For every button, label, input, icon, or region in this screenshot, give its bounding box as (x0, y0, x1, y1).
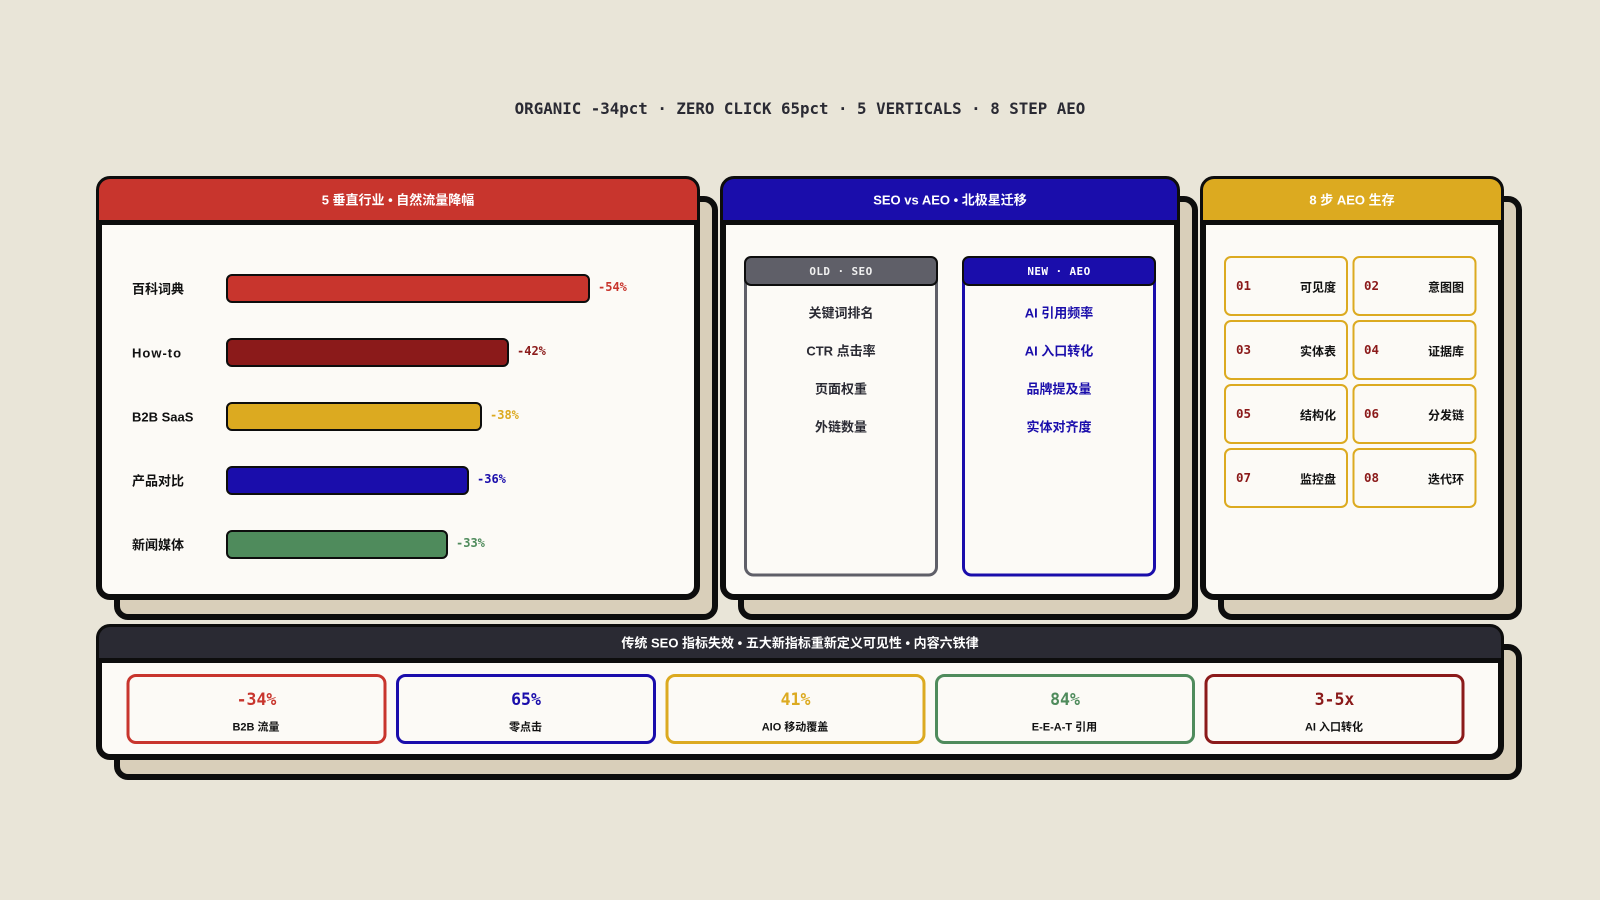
metric card: E-E-A-T 引用: 84% (1050, 690, 1080, 709)
panel shadow: steps (1221, 199, 1519, 617)
bar row: 产品对比 (132, 467, 507, 494)
column: old SEO: OLD · SEO (809, 265, 873, 278)
step 05: 结构化 (1300, 408, 1336, 422)
metric card: AIO 移动覆盖: 41% (781, 690, 810, 709)
bar row: 新闻媒体: -33% (456, 536, 486, 550)
column: new AEO: 品牌提及量 (1026, 382, 1092, 396)
bar row: 新闻媒体: 新闻媒体 (132, 538, 184, 552)
column: old SEO: 页面权重 (815, 382, 867, 396)
metric card: B2B 流量 (128, 676, 385, 742)
bar row: 百科词典: 百科词典 (132, 282, 184, 296)
step 08: 08 (1364, 470, 1379, 485)
panel shadow: verticals (117, 199, 715, 617)
bar row: How-to (132, 339, 547, 366)
step 04: 证据库 (1428, 344, 1464, 358)
panel: 8 step AEO (1203, 179, 1501, 597)
column: new AEO: 实体对齐度 (1026, 420, 1092, 434)
step 02: 02 (1364, 278, 1379, 293)
bar row: 百科词典 (132, 275, 628, 302)
panel header: metrics: 传统 SEO 指标失效 • 五大新指标重新定义可见性 • 内容六铁律 (621, 636, 979, 650)
panel header: 8 step: 8 步 AEO 生存 (1309, 192, 1395, 208)
step 04: 04 (1364, 342, 1379, 357)
column: new AEO: AI 入口转化 (1025, 344, 1093, 358)
step 07: 07 (1236, 470, 1251, 485)
bar row: B2B SaaS: -38% (490, 408, 520, 422)
bar row: How-to: How-to (132, 346, 182, 360)
metric card: B2B 流量: -34% (237, 690, 276, 709)
metric card: B2B 流量: B2B 流量 (232, 720, 280, 734)
bar row: B2B SaaS: B2B SaaS (132, 410, 194, 424)
panel: key metrics (99, 627, 1501, 757)
panel header: SEO vs AEO (723, 179, 1177, 225)
step 03: 03 (1236, 342, 1251, 357)
step 02: 意图图 (1428, 280, 1464, 294)
step 07 (1225, 449, 1347, 507)
bar row: B2B SaaS (132, 403, 520, 430)
step 03 (1225, 321, 1347, 379)
step 03: 实体表 (1300, 344, 1336, 358)
bar row: 新闻媒体 (132, 531, 486, 558)
step 01: 可见度 (1300, 280, 1336, 294)
step 05: 05 (1236, 406, 1251, 421)
panel: verticals traffic decline (99, 179, 697, 597)
step 08 (1354, 449, 1476, 507)
metric card: AI 入口转化 (1206, 676, 1463, 742)
column: new AEO (963, 257, 1155, 575)
column: new AEO: NEW · AEO (1027, 265, 1091, 278)
step 08: 迭代环 (1428, 472, 1464, 486)
panel header: metrics (99, 627, 1501, 663)
panel header: verticals (99, 179, 697, 225)
step 04 (1354, 321, 1476, 379)
bar row: 产品对比: -36% (477, 472, 507, 486)
metric card: 零点击: 65% (511, 690, 541, 709)
metric card: 零点击: 零点击 (509, 720, 542, 734)
step 01 (1225, 257, 1347, 315)
panel shadow: comparison (741, 199, 1195, 617)
metric card: AI 入口转化: AI 入口转化 (1305, 720, 1363, 734)
subtitle stats line: ORGANIC -34pct · ZERO CLICK 65pct · 5 VERTICALS · 8 STEP AEO (515, 99, 1085, 118)
panel header: SEO vs AEO: SEO vs AEO • 北极星迁移 (873, 192, 1027, 208)
step 01: 01 (1236, 278, 1251, 293)
step 06: 06 (1364, 406, 1379, 421)
column: old SEO: 关键词排名 (808, 306, 874, 320)
step 07: 监控盘 (1300, 472, 1336, 486)
step 05 (1225, 385, 1347, 443)
panel header: verticals: 5 垂直行业 • 自然流量降幅 (322, 192, 474, 208)
column: old SEO: 外链数量 (815, 420, 867, 434)
step 02 (1354, 257, 1476, 315)
metric card: E-E-A-T 引用 (936, 676, 1194, 742)
step 06 (1354, 385, 1476, 443)
panel shadow: metrics (117, 647, 1519, 777)
bar row: How-to: -42% (517, 344, 547, 358)
bar row: 百科词典: -54% (598, 280, 628, 294)
column: new AEO: AI 引用频率 (1025, 306, 1093, 320)
metric card: 零点击 (398, 676, 654, 742)
bar row: 产品对比: 产品对比 (132, 474, 184, 488)
step 06: 分发链 (1428, 408, 1464, 422)
panel header: 8 step (1203, 179, 1501, 225)
column: old SEO (745, 257, 937, 575)
column: old SEO: CTR 点击率 (806, 344, 876, 358)
panel: SEO vs AEO (723, 179, 1177, 597)
metric card: AI 入口转化: 3-5x (1315, 690, 1354, 709)
metric card: AIO 移动覆盖: AIO 移动覆盖 (762, 720, 828, 734)
metric card: AIO 移动覆盖 (667, 676, 924, 742)
metric card: E-E-A-T 引用: E-E-A-T 引用 (1032, 720, 1097, 734)
